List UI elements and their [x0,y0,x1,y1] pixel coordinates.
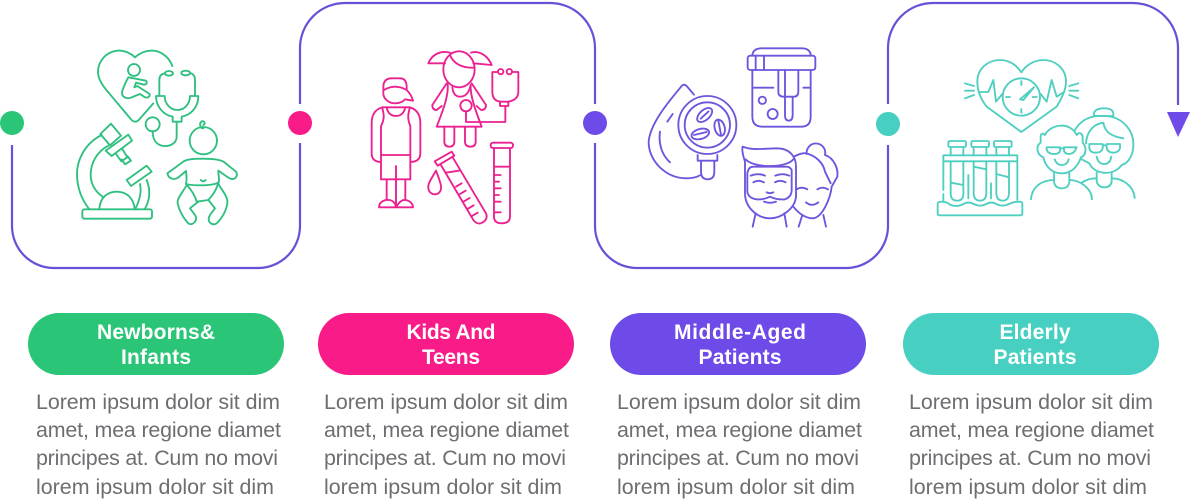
text block: kids: lorem ipsum dolor sit dim [324,475,562,499]
text block: kids: amet, mea regione diamet [324,418,569,442]
icon: middle-aged patients [649,48,838,227]
icon: kids and teens [372,51,518,224]
pill heading: Middle-Aged Patients: Patients [698,346,782,369]
step dot: teal [876,112,900,136]
pill heading: Elderly Patients: Elderly [1000,321,1071,344]
text block: newborns: principes at. Cum no movi [36,446,278,470]
pill heading: Newborns & Infants: Newborns& [97,321,215,344]
icon: elderly patients [938,60,1135,215]
text block: middle-aged: lorem ipsum dolor sit dim [617,475,855,499]
text block: kids: Lorem ipsum dolor sit dim [324,390,568,414]
step dot: green [0,111,24,135]
text block: elderly: amet, mea regione diamet [909,418,1154,442]
text block: middle-aged: Lorem ipsum dolor sit dim [617,390,861,414]
text block: middle-aged: amet, mea regione diamet [617,418,862,442]
text block: kids [324,390,569,499]
text block: newborns: Lorem ipsum dolor sit dim [36,390,280,414]
text block: newborns: amet, mea regione diamet [36,418,281,442]
pill heading: Newborns & Infants [28,313,284,375]
text block: kids: principes at. Cum no movi [324,446,566,470]
icon: newborn care [77,51,237,224]
pill heading: Elderly Patients [903,313,1159,375]
text block: elderly: lorem ipsum dolor sit dim [909,475,1147,499]
pill heading: Newborns & Infants: Infants [121,346,191,369]
pill heading: Kids And Teens [318,313,574,375]
text block: newborns: lorem ipsum dolor sit dim [36,475,274,499]
pill heading: Kids And Teens: Teens [422,346,480,369]
pill heading: Middle-Aged Patients: Middle-Aged [674,321,806,344]
text block: middle-aged: principes at. Cum no movi [617,446,859,470]
flow line [12,3,1178,268]
text block: elderly [909,390,1154,499]
step dot: pink [288,111,312,135]
text block: elderly: Lorem ipsum dolor sit dim [909,390,1153,414]
pill heading: Elderly Patients: Patients [994,346,1076,369]
text block: middle-aged [617,390,862,499]
step dot: purple [583,111,607,135]
text block: newborns [36,390,281,499]
pill heading: Middle-Aged Patients [610,313,866,375]
text block: elderly: principes at. Cum no movi [909,446,1151,470]
arrow head [1167,112,1190,137]
pill heading: Kids And Teens: Kids And [406,321,496,344]
